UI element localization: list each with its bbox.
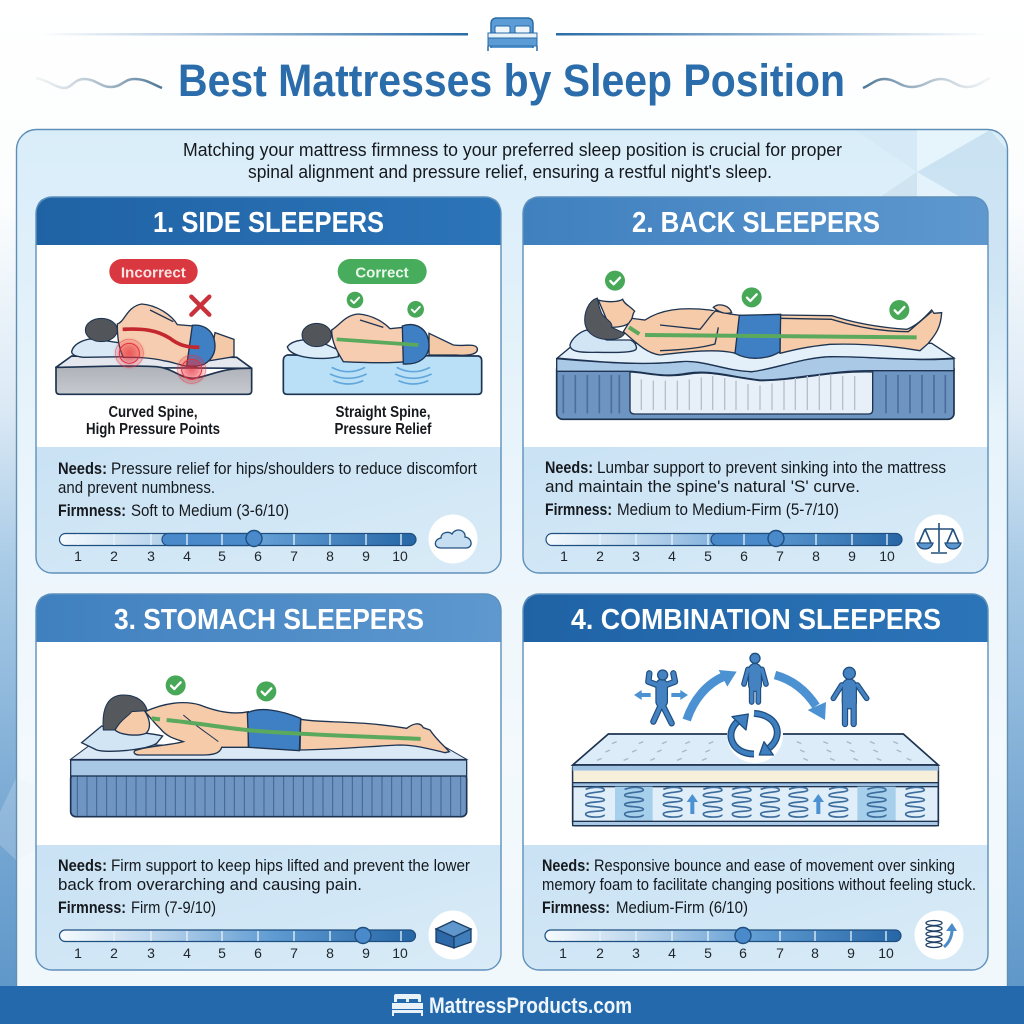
- firmness scale 5-7: 5: [704, 548, 712, 564]
- firmness scale 9: 8: [326, 945, 334, 961]
- icon: cloud: [428, 514, 478, 564]
- caption: straight spine: Pressure Relief: [334, 421, 432, 438]
- firmness scale 5-7: 4: [668, 548, 676, 564]
- firmness scale 3-6: [60, 530, 416, 564]
- combination sleepers header: [523, 594, 988, 642]
- firmness scale 9: 4: [183, 945, 191, 961]
- footer: [0, 986, 1024, 1024]
- firmness scale 9: 10: [392, 945, 408, 961]
- firmness scale 3-6: 10: [392, 548, 408, 564]
- side sleepers header: [36, 197, 501, 245]
- panel: stomach sleepers: [36, 594, 501, 970]
- figure: standing person center: [744, 653, 766, 702]
- firmness scale 6: 7: [776, 945, 784, 961]
- back sleepers header: 2. BACK SLEEPERS: [632, 207, 880, 239]
- side sleepers details: Needs:: [58, 459, 107, 478]
- back sleepers header: [523, 197, 988, 245]
- figure: jumping person: [648, 670, 675, 723]
- firmness scale 6: 8: [811, 945, 819, 961]
- stomach sleepers details: Needs:: [58, 856, 107, 875]
- back sleepers details: Lumbar support to prevent sinking into the mattress: [597, 458, 946, 477]
- firmness scale 5-7: 2: [596, 548, 604, 564]
- firmness scale 5-7: 8: [812, 548, 820, 564]
- combination sleepers details: Firmness:: [542, 898, 610, 917]
- back sleepers details: and maintain the spine's natural 'S' curve.: [545, 477, 860, 496]
- firmness scale 3-6: 5: [218, 548, 226, 564]
- stomach sleepers details: Firm support to keep hips lifted and prevent the lower: [111, 856, 470, 875]
- icon: firm cube: [428, 910, 478, 960]
- firmness scale 3-6: 4: [183, 548, 191, 564]
- combination sleepers details: Needs:: [542, 856, 590, 875]
- firmness scale 9: 6: [254, 945, 262, 961]
- firmness scale 5-7: 10: [879, 548, 895, 564]
- firmness scale 5-7: 1: [560, 548, 568, 564]
- caption: curved spine: [86, 404, 220, 438]
- firmness scale 6: 1: [559, 945, 567, 961]
- firmness scale 9: 2: [110, 945, 118, 961]
- intro text: Matching your mattress firmness to your preferred sleep position is crucial for proper: [183, 139, 842, 160]
- firmness scale 5-7: 7: [776, 548, 784, 564]
- illustration: incorrect side position: Incorrect: [121, 264, 186, 281]
- firmness scale 3-6: 1: [74, 548, 82, 564]
- combination sleepers details: Responsive bounce and ease of movement over sinking: [594, 856, 955, 875]
- firmness scale 3-6: 9: [362, 548, 370, 564]
- firmness scale 6: 4: [668, 945, 676, 961]
- figure: standing person right: [833, 667, 867, 724]
- illustration: stomach sleeper on mattress: [71, 675, 467, 817]
- intro text: spinal alignment and pressure relief, ensuring a restful night's sleep.: [248, 161, 772, 182]
- stomach sleepers details: Firmness:: [58, 898, 126, 917]
- stomach sleepers details: back from overarching and causing pain.: [58, 875, 362, 894]
- illustration: correct side position: [283, 259, 482, 394]
- stomach sleepers details: Firm (7-9/10): [131, 898, 216, 917]
- firmness scale 6: 3: [632, 945, 640, 961]
- stomach sleepers details: [36, 845, 501, 970]
- firmness scale 5-7: 3: [632, 548, 640, 564]
- back sleepers details: Medium to Medium-Firm (5-7/10): [617, 500, 839, 519]
- back sleepers details: [523, 447, 988, 573]
- panel: back sleepers: [523, 197, 988, 573]
- firmness scale 9: 5: [218, 945, 226, 961]
- icon: balance scale: [914, 514, 964, 564]
- firmness scale 6: [545, 928, 901, 961]
- firmness scale 6: 10: [878, 945, 894, 961]
- combination sleepers details: Medium-Firm (6/10): [616, 898, 748, 917]
- firmness scale 5-7: [546, 530, 902, 564]
- side sleepers header: 1. SIDE SLEEPERS: [153, 207, 384, 239]
- caption: straight spine: [334, 404, 432, 438]
- firmness scale 6: 6: [739, 945, 747, 961]
- firmness scale 6: 5: [704, 945, 712, 961]
- panel: combination sleepers: [523, 594, 988, 970]
- title: Best Mattresses by Sleep Position: [178, 55, 845, 106]
- stomach sleepers header: 3. STOMACH SLEEPERS: [114, 604, 424, 636]
- firmness scale 6: 2: [596, 945, 604, 961]
- combination sleepers details: [523, 845, 988, 970]
- firmness scale 6: 9: [847, 945, 855, 961]
- icon: footer bed: [392, 994, 423, 1016]
- footer: MattressProducts.com: [429, 993, 632, 1018]
- illustration: back sleeper on mattress: [557, 271, 954, 419]
- caption: curved spine: High Pressure Points: [86, 421, 220, 438]
- intro text: [183, 139, 842, 182]
- firmness scale 3-6: 7: [290, 548, 298, 564]
- top rule with bed icon: [40, 18, 990, 51]
- caption: curved spine: Curved Spine,: [108, 404, 198, 421]
- stomach sleepers header: [36, 594, 501, 642]
- illustration: moving figures over hybrid mattress: [573, 653, 938, 826]
- illustration: correct side position: Correct: [355, 264, 409, 281]
- firmness scale 3-6: 2: [110, 548, 118, 564]
- side sleepers details: Firmness:: [58, 501, 126, 520]
- side sleepers details: Pressure relief for hips/shoulders to reduce discomfort: [111, 459, 477, 478]
- side sleepers details: [36, 447, 501, 573]
- firmness scale 9: 7: [290, 945, 298, 961]
- back sleepers details: Needs:: [545, 458, 593, 477]
- back sleepers details: Firmness:: [545, 500, 612, 519]
- side sleepers details: Soft to Medium (3-6/10): [131, 501, 289, 520]
- side sleepers details: and prevent numbness.: [58, 478, 215, 497]
- firmness scale 5-7: 9: [848, 548, 856, 564]
- firmness scale 3-6: 8: [326, 548, 334, 564]
- caption: straight spine: Straight Spine,: [336, 404, 430, 421]
- firmness scale 9: 9: [362, 945, 370, 961]
- combination sleepers header: 4. COMBINATION SLEEPERS: [571, 604, 941, 636]
- firmness scale 3-6: 6: [254, 548, 262, 564]
- firmness scale 9: 3: [147, 945, 155, 961]
- icon: spring with arrow: [914, 910, 964, 960]
- firmness scale 9: 1: [74, 945, 82, 961]
- illustration: incorrect side position: [56, 259, 252, 394]
- firmness scale 9: [60, 928, 416, 961]
- firmness scale 5-7: 6: [740, 548, 748, 564]
- firmness scale 3-6: 3: [147, 548, 155, 564]
- panel: side sleepers: [36, 197, 501, 573]
